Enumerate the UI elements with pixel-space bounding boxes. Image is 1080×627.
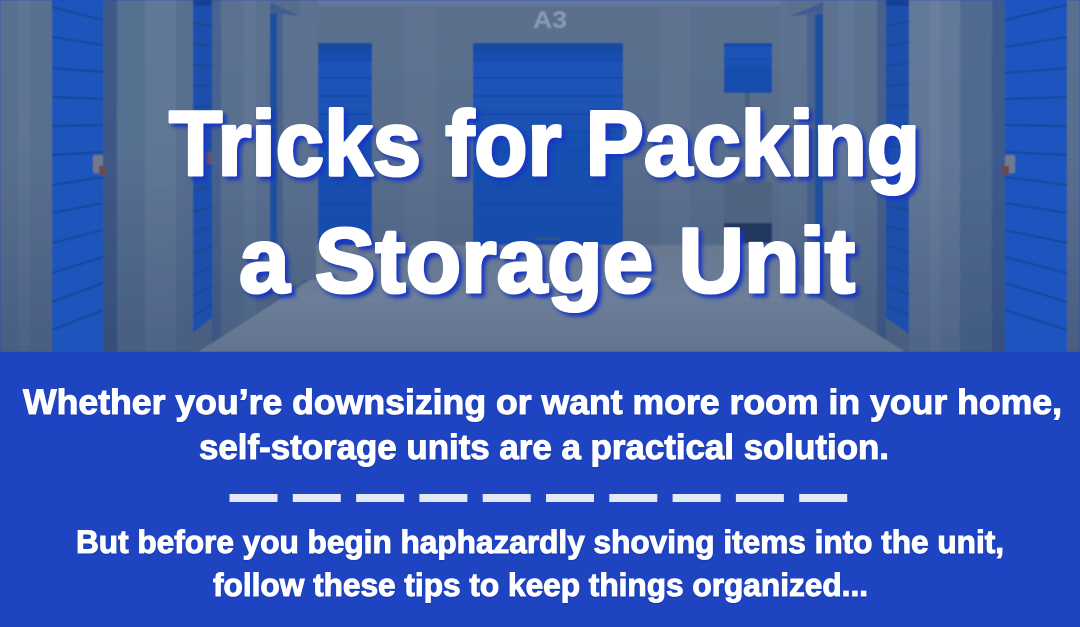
- door: far back left: [318, 43, 372, 245]
- floor: [198, 245, 905, 352]
- wall shading: [0, 0, 1080, 352]
- door: near left: [52, 0, 106, 352]
- door: far back centre: [473, 43, 623, 245]
- panel: intro: [0, 352, 1080, 627]
- sign: small blue panel with kiosk: [724, 43, 772, 243]
- label: A3: A3: [533, 7, 567, 34]
- dashed divider: [230, 494, 847, 502]
- title line 1: Tricks for Packing: [169, 93, 920, 195]
- left corridor wall: [0, 0, 318, 352]
- intro text: [23, 383, 1062, 467]
- intro text: self-storage units are a practical solution.: [199, 428, 889, 467]
- hero photo: storage corridor: [0, 0, 1080, 352]
- follow-up text: [76, 524, 1004, 603]
- title: [169, 93, 920, 312]
- door: near right: [1002, 0, 1067, 352]
- title line 2: a Storage Unit: [239, 210, 855, 312]
- intro text: Whether you’re downsizing or want more room in your home,: [23, 383, 1062, 422]
- door: far left: [270, 13, 277, 256]
- back wall: [0, 0, 1080, 352]
- door: middle left: [193, 0, 212, 333]
- door: far right: [815, 13, 823, 292]
- follow-up text: But before you begin haphazardly shoving items into the unit,: [76, 524, 1004, 560]
- follow-up text: follow these tips to keep things organized...: [213, 567, 868, 603]
- door: middle right: [886, 0, 909, 334]
- right corridor wall: [780, 0, 1080, 352]
